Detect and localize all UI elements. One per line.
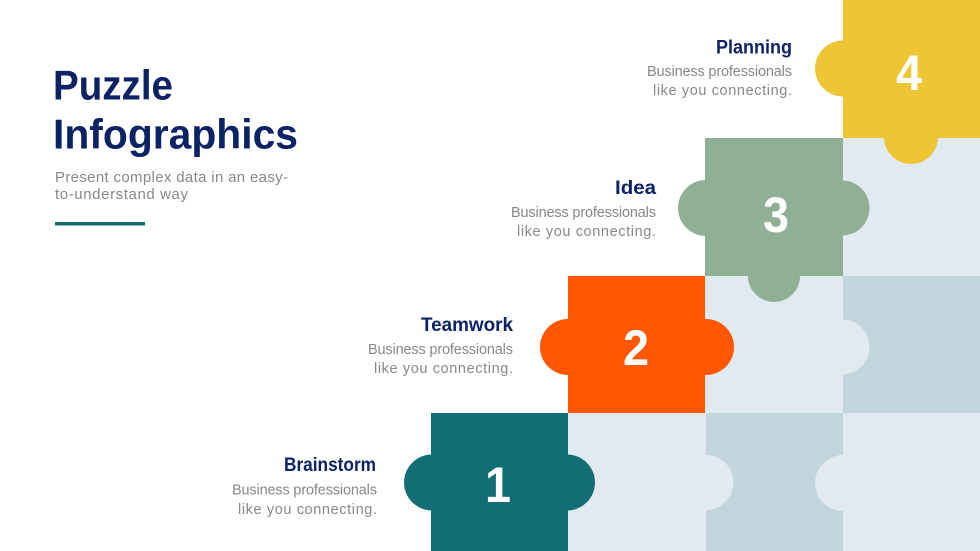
- subtitle: Present complex data in an easy-: [55, 169, 288, 186]
- puzzle piece 3: Idea: [678, 138, 870, 302]
- label: Planning: [647, 38, 792, 99]
- label: Idea: Idea: [615, 178, 656, 199]
- label: Idea: [511, 178, 656, 240]
- label: Planning: like you connecting.: [653, 83, 792, 99]
- label: Idea: Business professionals: [511, 205, 656, 221]
- background puzzle tiles: [568, 138, 980, 551]
- puzzle piece 1: Brainstorm: [404, 413, 595, 551]
- title: Infographics: [53, 110, 298, 158]
- puzzle piece 1: Brainstorm: 1: [485, 457, 511, 513]
- puzzle piece 4: Planning: 4: [896, 45, 922, 101]
- accent underline: [55, 222, 145, 226]
- label: Brainstorm: Business professionals: [232, 482, 377, 498]
- label: Planning: Business professionals: [647, 64, 792, 80]
- label: Brainstorm: Brainstorm: [284, 455, 376, 476]
- label: Teamwork: like you connecting.: [374, 361, 513, 377]
- subtitle: to-understand way: [55, 186, 188, 203]
- puzzle piece 2: Teamwork: [540, 276, 734, 413]
- label: Teamwork: Teamwork: [421, 315, 513, 336]
- label: Brainstorm: [232, 455, 377, 518]
- label: Teamwork: [368, 315, 513, 377]
- label: Planning: Planning: [716, 38, 792, 58]
- subtitle: [55, 169, 288, 203]
- puzzle piece 4: Planning: [815, 0, 980, 164]
- title: Puzzle: [53, 62, 173, 108]
- puzzle piece 2: Teamwork: 2: [623, 320, 649, 376]
- label: Brainstorm: like you connecting.: [238, 502, 377, 518]
- puzzle piece 3: Idea: 3: [763, 187, 789, 243]
- label: Teamwork: Business professionals: [368, 342, 513, 358]
- label: Idea: like you connecting.: [517, 224, 656, 240]
- title: [53, 62, 298, 158]
